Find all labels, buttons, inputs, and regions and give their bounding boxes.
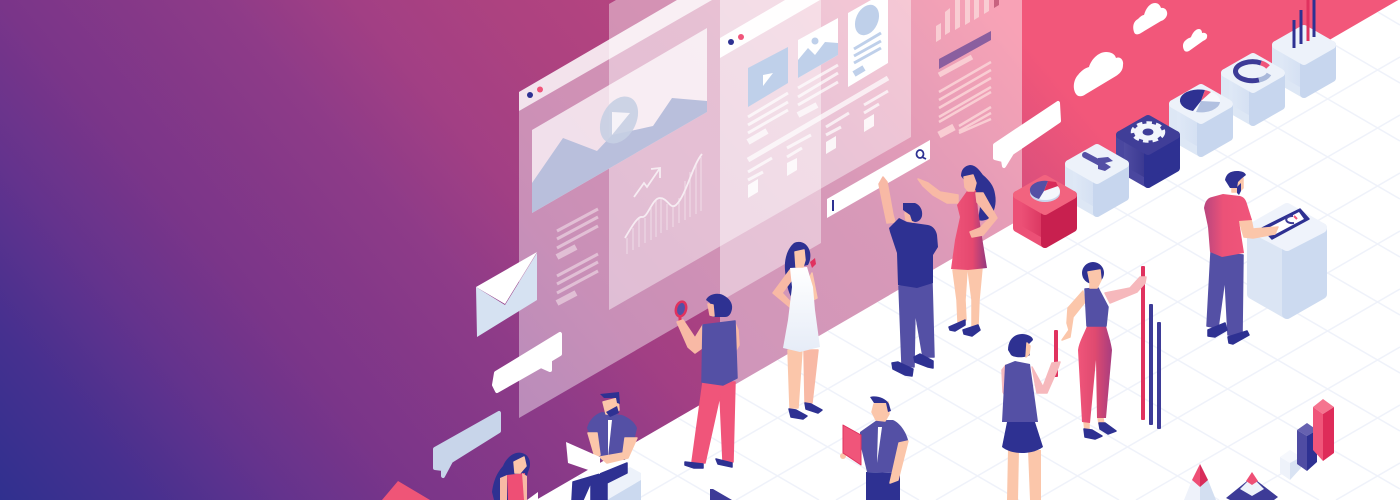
folder [840,425,861,465]
head [870,396,891,421]
trousers [866,472,900,500]
laptop [566,442,600,474]
laptop edge [710,489,732,500]
head [1008,334,1033,357]
person: man at tablet [1204,171,1322,344]
line chart with arrow [625,154,702,254]
window: report page [936,0,999,135]
icon: cloud large [1074,52,1123,96]
bar red [1313,399,1334,461]
trousers [1078,326,1112,423]
icon: cloud medium [1133,3,1167,34]
profile card [848,0,888,87]
bar chart [936,0,999,42]
speech bubble: white left [494,334,560,391]
bars [1141,266,1161,429]
person: woman with bars [1062,262,1161,439]
trousers [692,382,735,463]
legs [953,270,967,322]
pedestal [1252,208,1322,314]
arm right [522,473,527,500]
search bar [827,140,930,218]
shirt [587,412,637,460]
shoes [1208,323,1249,344]
stepped pyramid [1226,472,1278,500]
icon: cloud small [1183,29,1207,52]
3D bar chart [1280,399,1334,480]
face [795,250,805,267]
top [702,321,737,385]
trousers [572,463,627,500]
arm [879,177,895,223]
panel: translucent wall middle [609,0,911,310]
arm [1239,219,1278,238]
person: man with folder [840,396,908,500]
head [1082,262,1104,288]
bar white [1280,450,1301,480]
bar navy [1297,423,1317,471]
tie [877,427,882,463]
head [600,392,620,417]
arm [677,320,707,353]
window: content page [720,0,888,198]
arm left [500,475,507,500]
speech bubble: white right [995,103,1059,166]
hair [492,453,530,500]
pie chart cube [1173,88,1229,153]
person: seated man with laptop [566,392,641,500]
shoes [685,459,732,468]
shirt [860,420,908,473]
person: seated woman [492,453,538,500]
window: media browser [519,0,712,303]
legs [788,350,802,408]
speech bubble: blue [435,413,499,476]
hair [785,242,810,302]
text lines [557,209,598,303]
shoes [892,354,933,376]
gear cube [1120,119,1176,184]
video thumbnail [748,47,788,107]
hair [961,165,996,221]
arm [890,441,908,483]
head [1225,171,1246,195]
arm left [1002,365,1006,398]
heading bar [939,31,991,69]
shoes [1084,423,1116,439]
face [514,457,526,473]
wrench cube [1069,148,1125,213]
play button [592,90,646,150]
trousers [1207,252,1243,336]
phone [810,258,816,268]
tablet [1262,209,1309,239]
top [1002,361,1038,422]
content boxes [748,114,874,198]
content text lines [748,65,888,180]
arm right [1105,277,1146,303]
panel: translucent wall right [720,0,1022,420]
pie chart cube red [1017,179,1073,244]
skirt [1002,422,1043,453]
image thumbnail [798,18,838,78]
bar chart cube [1276,0,1332,94]
dress [783,267,820,352]
magnifier [674,300,688,322]
shirt [889,218,938,288]
arm left [1062,291,1085,340]
dress [507,473,527,500]
donut chart cube [1225,57,1281,122]
top [1085,288,1108,326]
person: woman with bob and stick [1002,330,1060,500]
hand on hip arm [970,193,997,237]
arms [773,270,798,313]
title bar [720,0,820,58]
person: man pointing at search [879,177,938,376]
arm right [1032,362,1060,393]
title bar [519,0,712,111]
window dots [728,34,744,45]
person: woman in white dress [773,242,822,419]
shoes [949,320,980,336]
laptop [527,492,538,500]
person: woman in red dress [918,165,997,336]
panel: translucent wall left [519,0,821,418]
head [903,203,922,222]
red shape corner [382,481,430,500]
tie [608,420,612,457]
bench [590,467,641,500]
stick [1054,330,1058,377]
cone pyramid [1184,464,1216,500]
ankles [1084,418,1104,431]
shoes [789,403,822,419]
head [706,294,732,317]
text lines [939,57,991,135]
trousers [899,283,934,367]
person: woman with magnifier [674,294,739,468]
pointing arm [918,179,958,203]
legs [1007,450,1019,500]
floor [536,0,1400,500]
mountain silhouette [532,98,707,213]
image placeholder [532,28,707,213]
window dots [527,86,543,98]
face [964,175,976,191]
dress [951,190,987,270]
icon: envelope [476,252,537,337]
shirt [1204,194,1252,257]
floor grid [578,12,1400,500]
arms [588,433,600,457]
